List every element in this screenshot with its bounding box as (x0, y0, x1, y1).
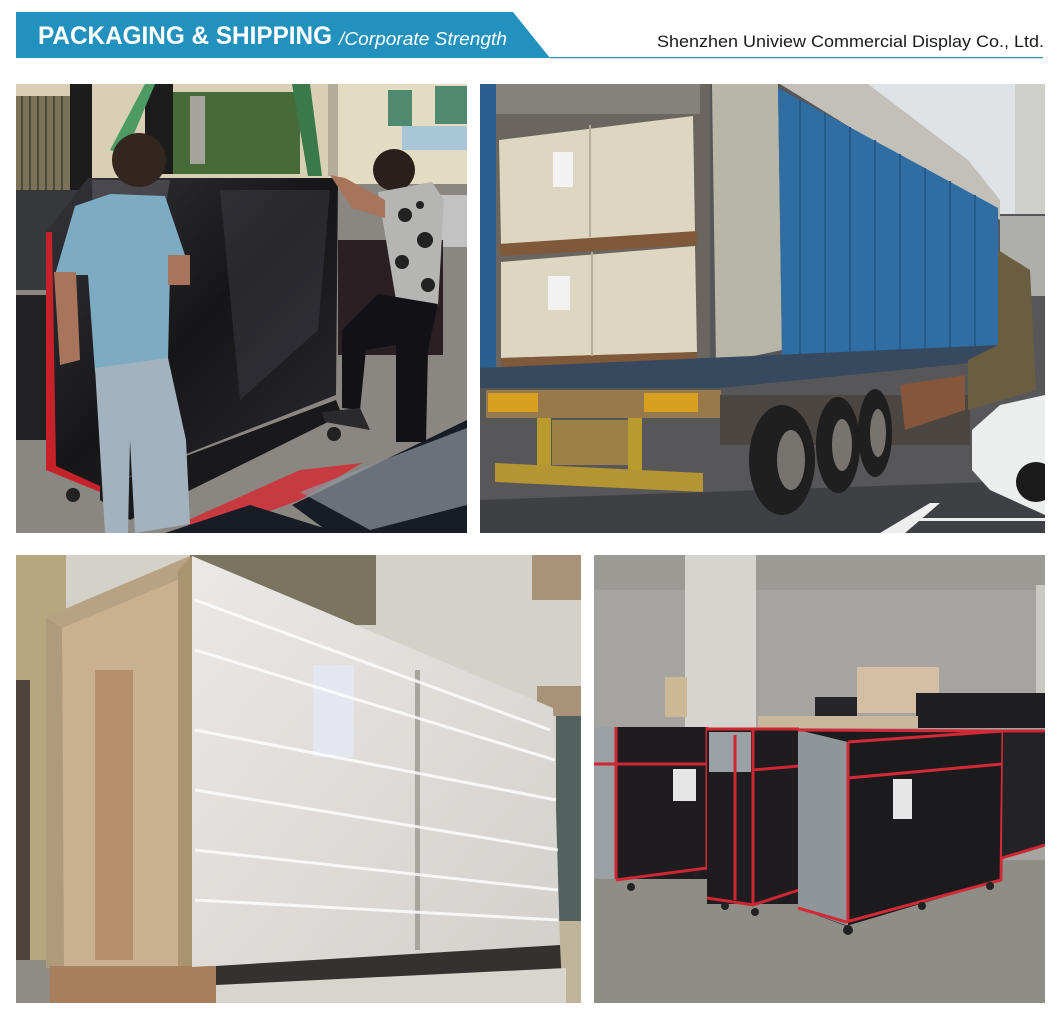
flight case middle (707, 729, 799, 916)
crate pallet (216, 945, 566, 1003)
flight case far right (1002, 731, 1045, 858)
company name: Shenzhen Uniview Commercial Display Co., Ltd. (657, 32, 1044, 51)
worker in blue shirt (54, 133, 190, 533)
banner subtitle: /Corporate Strength (337, 29, 507, 49)
worker in patterned shirt (322, 149, 444, 442)
photo: red flight cases in warehouse (594, 555, 1045, 1003)
white car (972, 395, 1045, 515)
flight case right (798, 730, 1003, 935)
flight case left (594, 727, 707, 891)
crate side panel with film (192, 556, 560, 967)
photo: wooden crate wrapped in film (16, 555, 581, 1003)
truck wheels (749, 389, 892, 515)
upper wooden crate (499, 116, 697, 256)
crate end panel (46, 556, 216, 1003)
truck cab (968, 250, 1036, 410)
flight case wrapped in film (46, 178, 342, 520)
photo: container truck (480, 84, 1056, 533)
photo: workers wrapping flight case (16, 84, 467, 533)
header banner (16, 12, 550, 58)
lower wooden crate (501, 246, 697, 369)
banner title: PACKAGING & SHIPPING (38, 22, 332, 50)
